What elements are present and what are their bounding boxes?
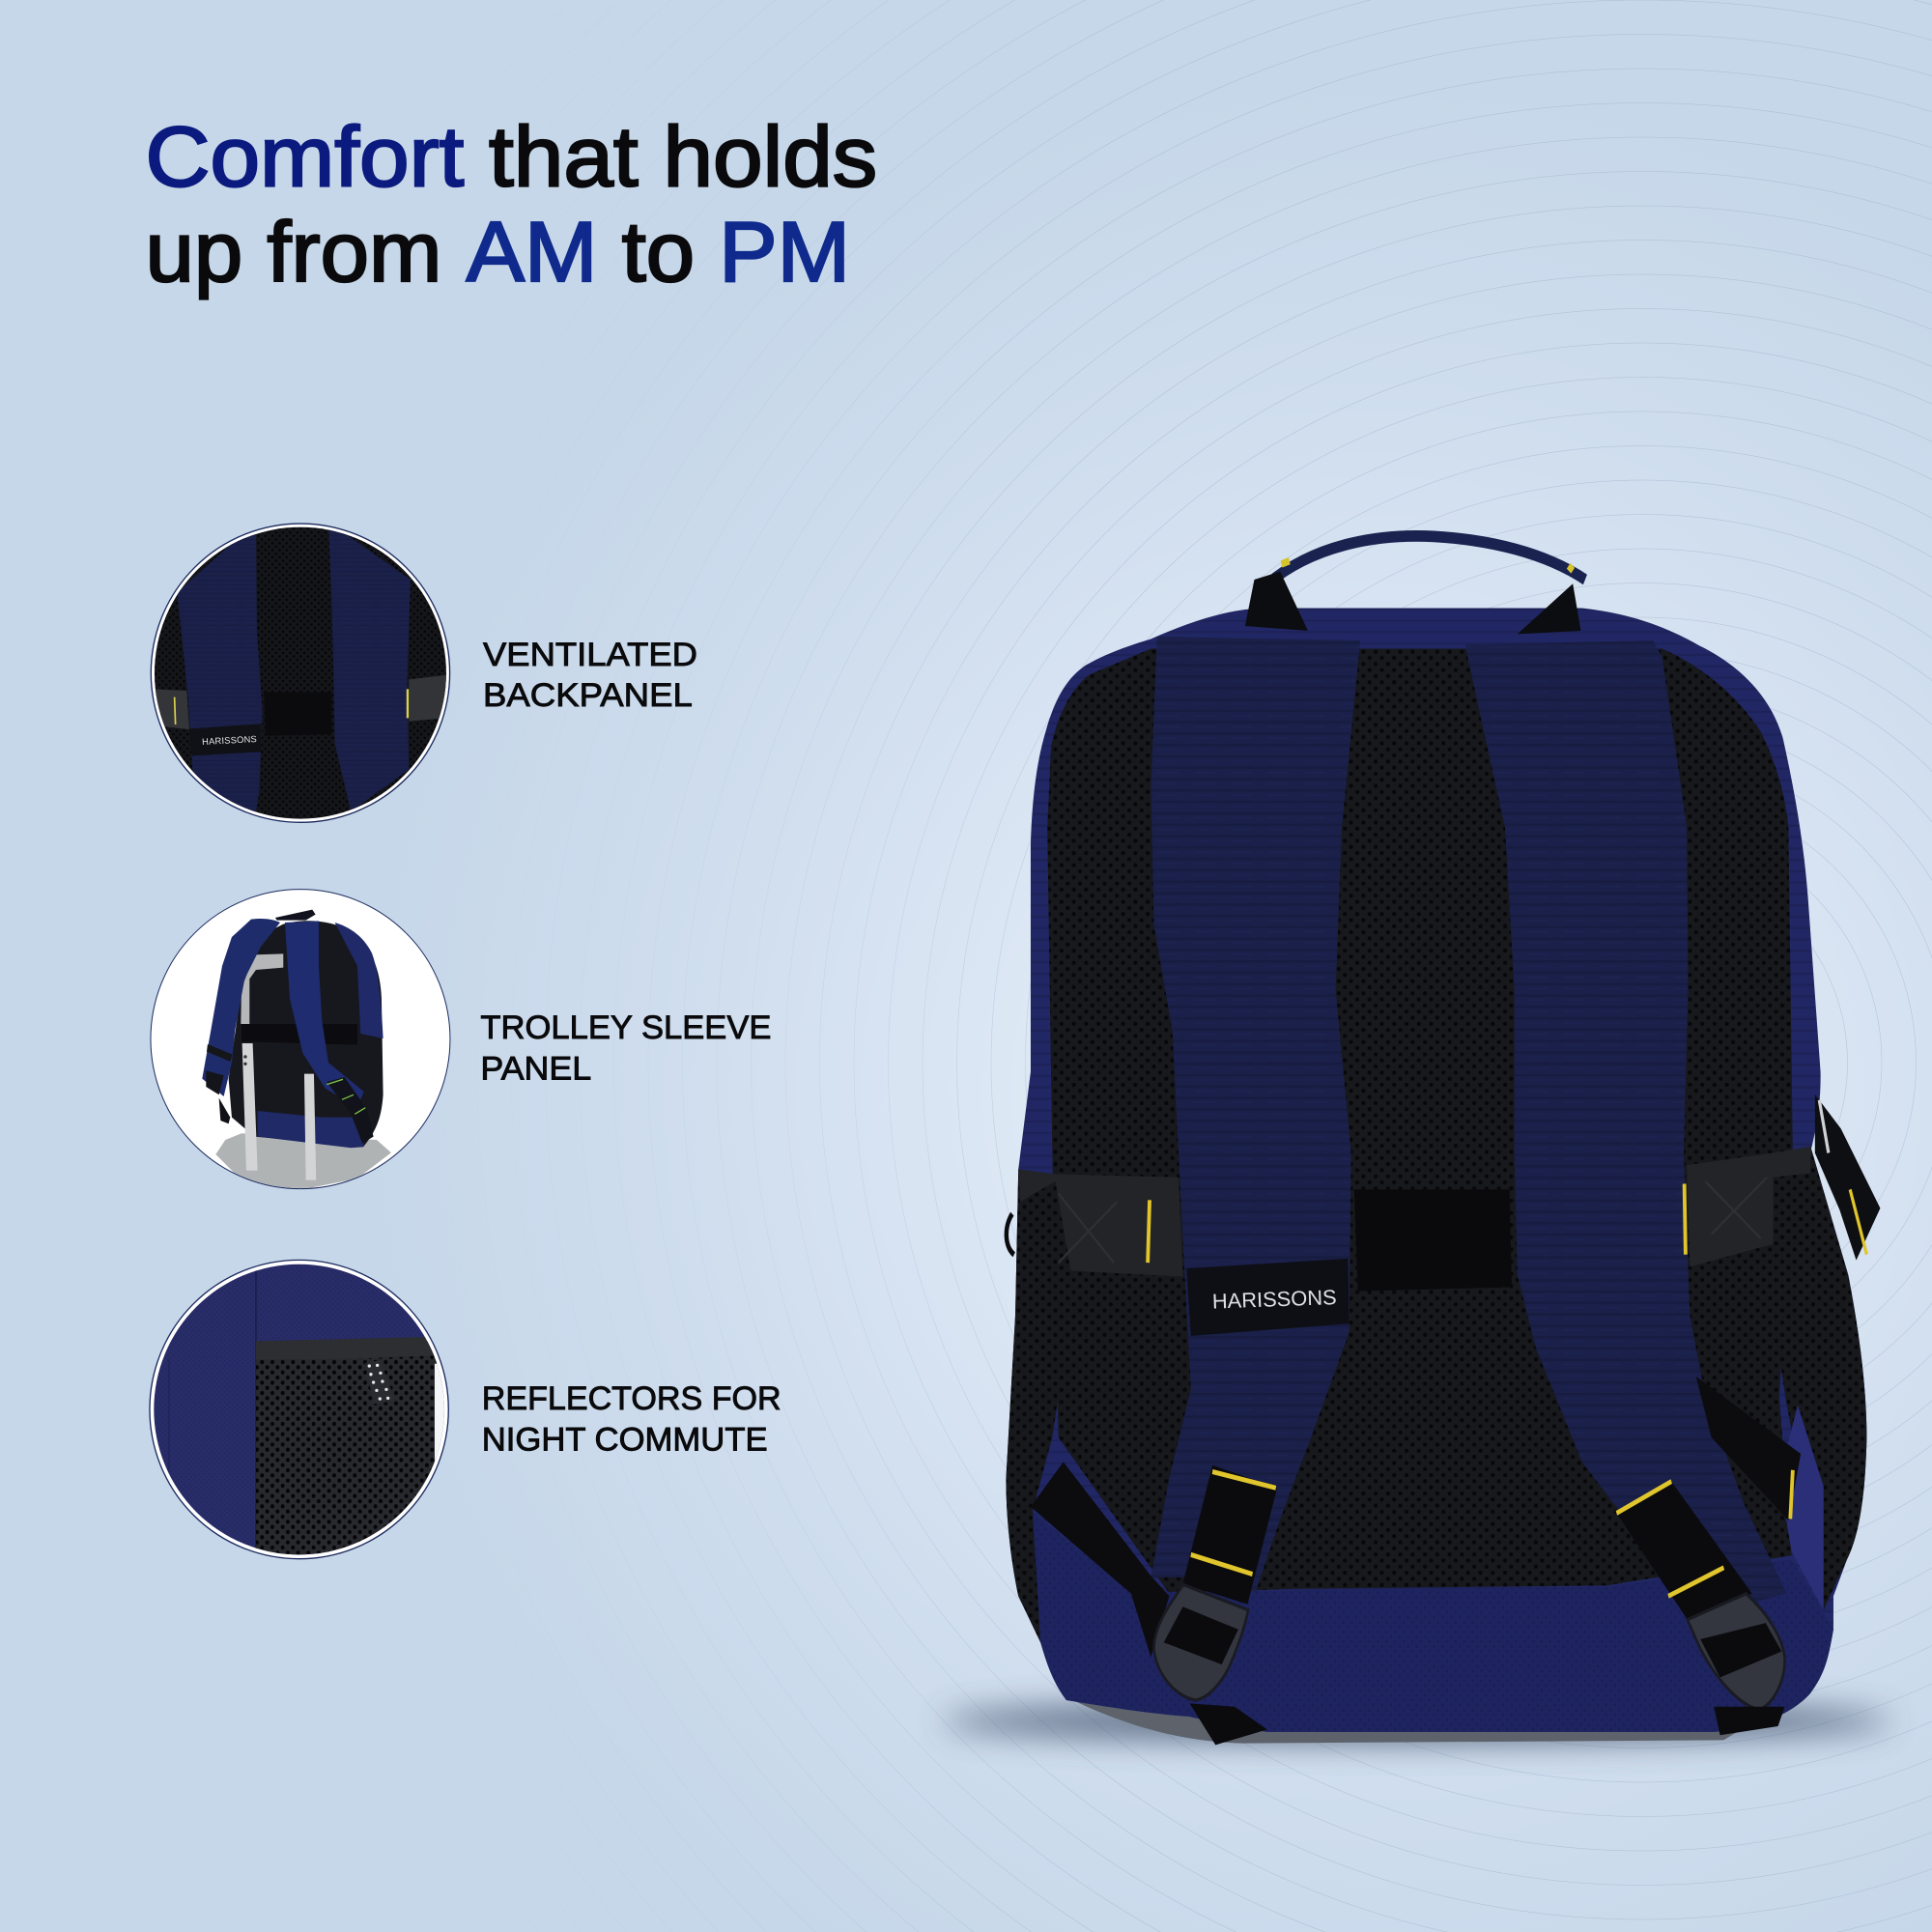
left shoulder strap [1151,637,1360,1592]
backpack body [1006,608,1866,1732]
infographic canvas [149,123,1895,1765]
left adjuster webbing [1182,1465,1277,1605]
right webbing band [1687,1147,1811,1266]
title: Comfort that holds [146,109,877,205]
brand label patch [1186,1259,1350,1336]
feature label: reflectors: REFLECTORS FOR [482,1380,781,1417]
feature label: ventilated backpanel [483,637,697,714]
title: up from AM to PM [146,204,850,299]
feature label: reflectors [482,1380,781,1458]
right lower strap [1696,1377,1801,1520]
left lower strap [1031,1462,1169,1657]
backpack [1006,536,1880,1745]
right adjuster webbing [1616,1482,1752,1620]
feature circle: reflectors [145,1256,454,1567]
left side loop [1007,1214,1014,1255]
feature label: reflectors: NIGHT COMMUTE [482,1421,768,1458]
strap tails [1190,1703,1785,1745]
title [146,109,877,299]
feature circle: trolley sleeve panel [151,890,450,1191]
feature label: ventilated backpanel: VENTILATED [483,637,697,673]
feature circle: ventilated backpanel [145,519,454,828]
right shoulder strap [1465,640,1786,1618]
left side pocket [1006,1169,1070,1642]
feature label: ventilated backpanel: BACKPANEL [483,677,693,714]
concentric ring pattern [672,0,1932,1932]
centre strap [1354,1189,1512,1292]
lower padded panel [1033,1511,1833,1732]
left buckle [1154,1585,1248,1700]
backpack brand text: HARISSONS [1211,1285,1337,1314]
right side pocket [1773,1149,1866,1610]
left webbing band [1018,1169,1182,1276]
right buckle [1688,1594,1785,1710]
top handle [1245,536,1585,634]
back mesh panel [1047,649,1793,1594]
feature circle: ventilated backpanel: HARISSONS [202,734,257,747]
navy side insert [1779,1405,1824,1610]
base edge [1067,1698,1767,1744]
ground shadow [943,1700,1891,1743]
feature label: trolley sleeve panel: PANEL [480,1050,591,1087]
yellow stitching [1148,1183,1793,1596]
zipper pulls [1815,1094,1880,1261]
feature label: trolley sleeve panel: TROLLEY SLEEVE [480,1009,771,1046]
feature label: trolley sleeve panel [480,1009,771,1087]
webbing cross stitching [1059,1178,1767,1263]
